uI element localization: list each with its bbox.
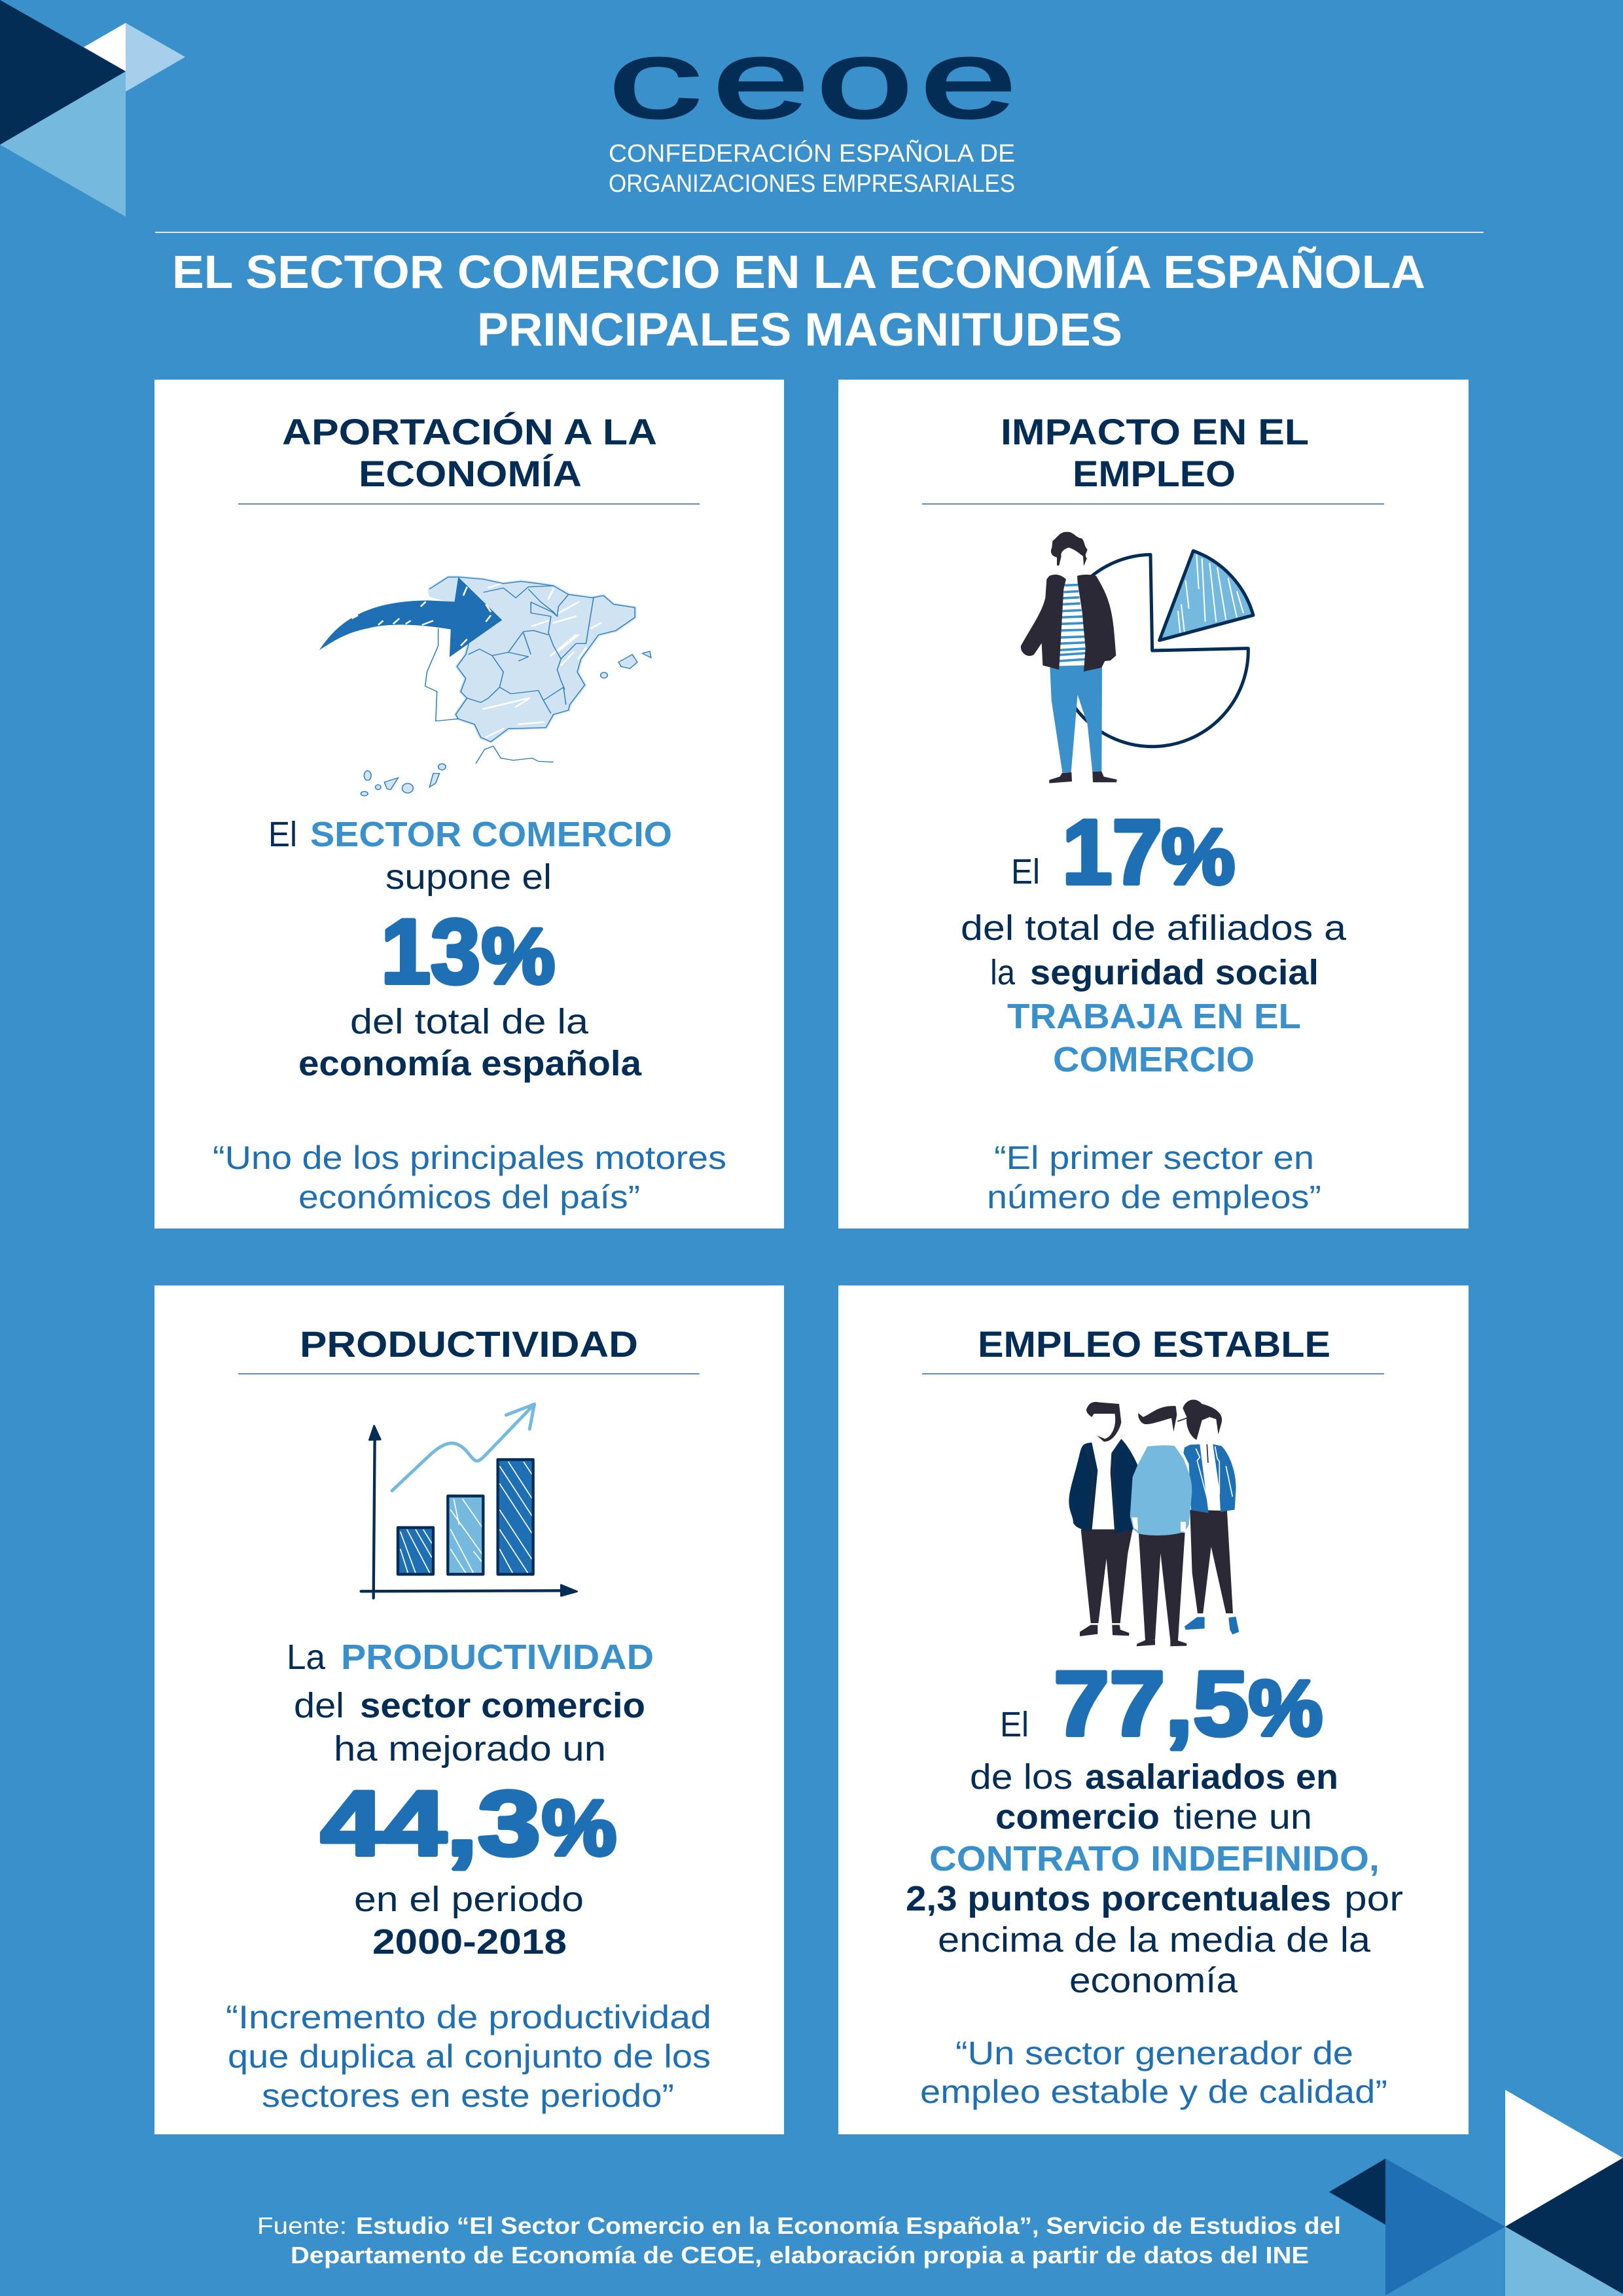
text block: SECTOR COMERCIO <box>310 815 672 854</box>
number: 44,3%: % <box>542 1784 616 1872</box>
person: right <box>1177 1399 1239 1634</box>
logo caption <box>609 139 1015 198</box>
icon: three people <box>1069 1399 1239 1646</box>
quote <box>226 1999 711 2114</box>
quote: sectores en este periodo” <box>262 2077 674 2114</box>
text block <box>268 815 672 1083</box>
number: 13% <box>381 900 555 1003</box>
text block: 2,3 puntos porcentuales <box>906 1879 1331 1918</box>
icon: bar chart with rising arrow <box>361 1404 577 1598</box>
pie chart <box>1056 551 1253 747</box>
number: 77,5%: 77,5 <box>1054 1652 1249 1755</box>
trend arrow <box>392 1404 535 1491</box>
text block: del total de la <box>350 1002 589 1041</box>
text block: asalariados en <box>1085 1757 1338 1797</box>
panel: aportación a la economía <box>154 380 784 1229</box>
person: left <box>1069 1402 1137 1636</box>
quote: “Un sector generador de <box>955 2035 1353 2072</box>
title: PRINCIPALES MAGNITUDES <box>477 304 1122 356</box>
number: 77,5%: % <box>1249 1664 1323 1752</box>
heading <box>1001 411 1309 494</box>
number: 77,5% <box>1054 1652 1323 1755</box>
text block: de los <box>970 1757 1073 1797</box>
quote: número de empleos” <box>987 1179 1321 1215</box>
logo caption: CONFEDERACIÓN ESPAÑOLA DE <box>609 139 1015 168</box>
text block: ha mejorado un <box>334 1729 606 1768</box>
text block <box>287 1638 654 1962</box>
decoration: bottom-right triangles <box>1329 2090 1623 2296</box>
islands <box>361 651 651 796</box>
text block: El <box>268 815 297 854</box>
number: 17%: 17 <box>1062 800 1162 903</box>
heading: ECONOMÍA <box>359 453 582 494</box>
text block: economía <box>1069 1961 1238 2000</box>
heading <box>282 411 657 494</box>
text block <box>961 852 1347 1079</box>
panel: productividad <box>154 1285 784 2134</box>
title <box>172 247 1425 356</box>
heading: IMPACTO EN EL <box>1001 411 1309 452</box>
heading: PRODUCTIVIDAD <box>300 1323 638 1365</box>
text block: del total de afiliados a <box>961 908 1347 948</box>
quote: “El primer sector en <box>994 1139 1314 1176</box>
bars <box>398 1460 533 1574</box>
quote: que duplica al conjunto de los <box>228 2038 711 2075</box>
text block: seguridad social <box>1030 953 1319 992</box>
text block: comercio <box>995 1797 1160 1837</box>
text block: del <box>294 1686 344 1725</box>
number: 13%: % <box>482 912 555 1000</box>
number: 13%: 13 <box>381 900 480 1003</box>
number: 17% <box>1062 800 1235 903</box>
decoration: top-left triangles <box>0 0 185 217</box>
text block: en el periodo <box>354 1880 584 1919</box>
text block: PRODUCTIVIDAD <box>341 1638 654 1677</box>
quote <box>920 2035 1387 2110</box>
text block: economía española <box>298 1044 642 1083</box>
logo caption: ORGANIZACIONES EMPRESARIALES <box>609 170 1015 198</box>
source note: Departamento de Economía de CEOE, elaboración propia a partir de datos del INE <box>291 2242 1309 2269</box>
text block: sector comercio <box>360 1686 645 1725</box>
heading: APORTACIÓN A LA <box>282 411 657 452</box>
quote: empleo estable y de calidad” <box>920 2073 1387 2110</box>
text block: CONTRATO INDEFINIDO, <box>929 1839 1380 1878</box>
text block: la <box>990 953 1016 992</box>
source note <box>257 2212 1341 2269</box>
quote: “Incremento de productividad <box>226 1999 711 2036</box>
title: EL SECTOR COMERCIO EN LA ECONOMÍA ESPAÑOLA <box>172 247 1425 298</box>
text block: El <box>1000 1705 1029 1744</box>
quote <box>987 1139 1321 1215</box>
text block: supone el <box>385 857 552 897</box>
text block: La <box>287 1638 326 1677</box>
quote <box>213 1139 726 1215</box>
heading: EMPLEO <box>1073 453 1236 494</box>
text block: El <box>1011 852 1040 891</box>
text block: TRABAJA EN EL <box>1007 997 1301 1036</box>
text block: 2000-2018 <box>372 1922 567 1962</box>
quote: “Uno de los principales motores <box>213 1139 726 1176</box>
text block: por <box>1344 1879 1403 1918</box>
source note: Estudio “El Sector Comercio en la Economía Española”, Servicio de Estudios del <box>356 2212 1341 2239</box>
number: 17%: % <box>1162 813 1235 901</box>
logo: CEOE: ceoe <box>605 26 1020 151</box>
text block: COMERCIO <box>1053 1040 1255 1079</box>
source note: Fuente: <box>257 2212 347 2239</box>
text block: tiene un <box>1173 1797 1312 1837</box>
text block: encima de la media de la <box>938 1920 1371 1960</box>
heading: EMPLEO ESTABLE <box>978 1323 1330 1365</box>
text block <box>906 1705 1403 2000</box>
icon: map of Spain with arrow <box>319 577 651 796</box>
person: centre <box>1130 1406 1192 1646</box>
icon: person with pie chart <box>1021 532 1253 783</box>
number: 44,3% <box>321 1772 616 1874</box>
figure <box>1021 532 1117 783</box>
panel: empleo estable <box>838 1285 1469 2134</box>
quote: económicos del país” <box>298 1179 640 1215</box>
number: 44,3%: 44,3 <box>321 1772 541 1874</box>
panel: impacto en el empleo <box>838 380 1469 1229</box>
